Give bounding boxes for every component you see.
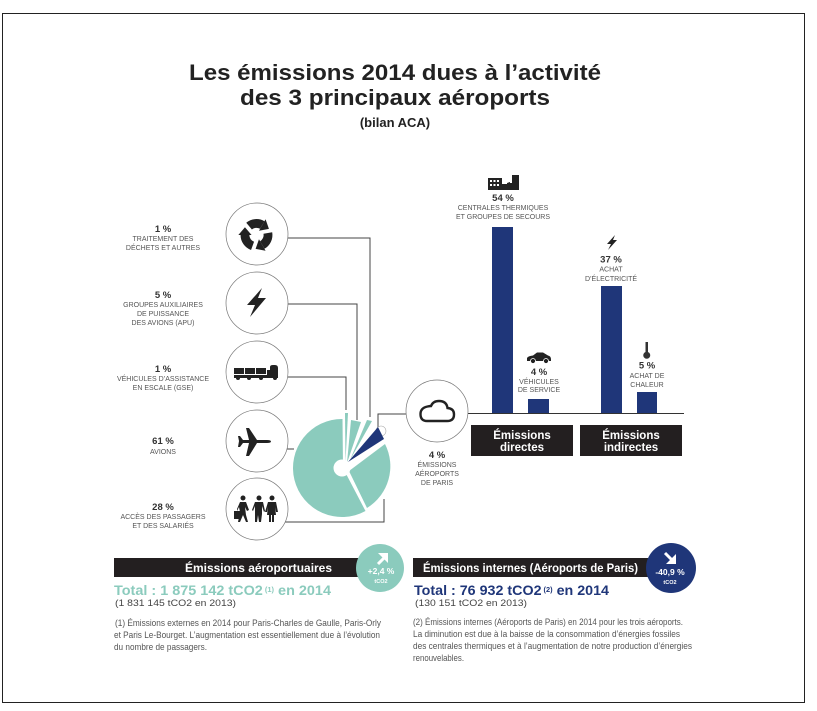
panel: émissions internes: Émissions internes (Aéroports de Paris) <box>423 562 638 575</box>
label: GSE: 1 % <box>155 364 172 375</box>
icon: factory <box>488 175 519 190</box>
label: électricité: ACHAT <box>599 266 623 274</box>
panel: émissions aéroportuaires <box>114 544 404 653</box>
label: véhicules <box>518 367 560 394</box>
panel: émissions internes: des centrales thermiques et à l’augmentation de notre production d’énergies <box>413 641 692 652</box>
slice: accès 28% <box>349 444 390 508</box>
title: des 3 principaux aéroports <box>240 85 550 110</box>
label box: émissions directes: Émissions <box>493 429 551 442</box>
label: chaleur: CHALEUR <box>630 382 664 389</box>
icon: recycling <box>226 203 288 265</box>
label: électricité <box>585 254 637 283</box>
label: émissions ADP <box>415 450 459 487</box>
bar: achat d'électricité <box>601 286 622 413</box>
panel: émissions aéroportuaires: (1) Émissions externes en 2014 pour Paris-Charles de Gaulle, Paris-Orly <box>115 618 381 629</box>
label: planes: AVIONS <box>150 449 176 456</box>
panel: émissions aéroportuaires: Émissions aéroportuaires <box>185 560 332 575</box>
label: planes <box>150 436 176 456</box>
panel: émissions aéroportuaires: (1 831 145 tCO2 en 2013) <box>115 598 236 609</box>
pie hole <box>334 460 350 476</box>
bar: achat de chaleur <box>637 392 657 413</box>
slice: Aéroports de Paris 4% <box>348 427 384 462</box>
icon: cloud <box>406 380 468 442</box>
small outlined disc behind navy slice <box>376 426 386 436</box>
panel: émissions aéroportuaires: et Paris Le-Bourget. L’augmentation est essentiellement due à l’évolution <box>114 630 380 641</box>
icon: passengers <box>226 478 288 540</box>
label: centrales: 54 % <box>492 193 514 204</box>
label: waste <box>126 224 200 252</box>
panel: émissions internes: (2) <box>542 587 553 594</box>
panel: émissions internes: (130 151 tCO2 en 2013) <box>415 598 527 609</box>
baseline <box>468 412 684 414</box>
label: GSE: VÉHICULES D’ASSISTANCE <box>117 374 209 383</box>
slice: avions 61% <box>293 419 366 517</box>
title: (bilan ACA) <box>360 115 430 130</box>
label box: émissions indirectes: Émissions <box>602 429 660 442</box>
label: planes: 61 % <box>152 436 174 447</box>
title <box>189 60 601 130</box>
slice: déchets 1% <box>350 420 372 460</box>
panel: émissions internes: en 2014 <box>553 583 610 598</box>
label: émissions ADP: ÉMISSIONS <box>418 460 457 469</box>
label: access: ET DES SALARIÉS <box>132 521 194 530</box>
label box: émissions indirectes <box>580 425 682 456</box>
panel: émissions internes: tCO2 <box>663 580 677 586</box>
panel: émissions internes: -40,9 % <box>655 567 685 577</box>
icon: small lightning <box>607 235 617 250</box>
bar: véhicules de service <box>528 399 549 413</box>
slice: GSE 1% <box>345 413 348 462</box>
label: émissions ADP: DE PARIS <box>421 480 453 487</box>
label box: émissions indirectes: indirectes <box>604 442 658 454</box>
icon: lightning <box>226 272 288 334</box>
label: GSE <box>117 364 209 392</box>
label: émissions ADP: AÉROPORTS <box>415 469 459 478</box>
panel: émissions aéroportuaires: en 2014 <box>274 583 332 598</box>
label: waste: DÉCHETS ET AUTRES <box>126 243 200 252</box>
label: APU: 5 % <box>155 290 172 301</box>
label: chaleur: ACHAT DE <box>630 373 665 380</box>
label box: émissions directes: directes <box>500 442 544 454</box>
connector lines <box>285 238 406 522</box>
label: access: 28 % <box>152 502 174 513</box>
panel: émissions internes: (2) Émissions internes (Aéroports de Paris) en 2014 pour les trois aéroports. <box>413 617 683 628</box>
label: APU: DE PUISSANCE <box>137 311 189 318</box>
label: centrales <box>456 193 550 221</box>
icon: truck <box>226 341 288 403</box>
label: chaleur: 5 % <box>639 360 656 372</box>
label: véhicules: VÉHICULES <box>519 377 559 386</box>
label: access <box>120 502 206 530</box>
panel: émissions aéroportuaires: Total : 1 875 142 tCO2 <box>114 583 253 598</box>
panel: émissions internes: La diminution est due à la baisse de la consommation d’énergies fossiles <box>413 629 680 640</box>
label box: émissions directes <box>471 425 573 456</box>
label: APU <box>123 290 203 327</box>
panel: émissions internes: Total : 76 932 tCO2 <box>414 583 535 598</box>
panel: émissions internes: renouvelables. <box>413 653 464 664</box>
label: véhicules: DE SERVICE <box>518 387 560 394</box>
title: Les émissions 2014 dues à l’activité <box>189 60 601 85</box>
icon: car <box>527 352 551 364</box>
bar: centrales thermiques <box>492 227 513 413</box>
slice: APU 5% <box>347 420 361 463</box>
label: électricité: D’ÉLECTRICITÉ <box>585 274 637 283</box>
label: électricité: 37 % <box>600 254 622 266</box>
panel: émissions aéroportuaires: du nombre de passagers. <box>114 642 207 653</box>
label: APU: DES AVIONS (APU) <box>132 320 194 327</box>
label: émissions ADP: 4 % <box>429 450 446 461</box>
label: chaleur <box>630 360 665 389</box>
label: centrales: ET GROUPES DE SECOURS <box>456 214 550 221</box>
icon: plane <box>226 410 288 472</box>
label: GSE: EN ESCALE (GSE) <box>133 385 193 392</box>
label: véhicules: 4 % <box>531 367 548 378</box>
pie chart <box>293 413 390 517</box>
label: APU: GROUPES AUXILIAIRES <box>123 302 203 309</box>
panel: émissions aéroportuaires: (1) <box>263 587 274 594</box>
label: waste: TRAITEMENT DES <box>133 236 194 243</box>
label: waste: 1 % <box>155 224 172 235</box>
panel: émissions internes <box>413 543 696 664</box>
label: access: ACCÈS DES PASSAGERS <box>120 512 206 521</box>
panel: émissions aéroportuaires: +2,4 % <box>368 566 395 576</box>
panel: émissions aéroportuaires: tCO2 <box>374 579 388 585</box>
label: centrales: CENTRALES THERMIQUES <box>458 205 549 212</box>
icon: thermometer <box>643 342 650 359</box>
